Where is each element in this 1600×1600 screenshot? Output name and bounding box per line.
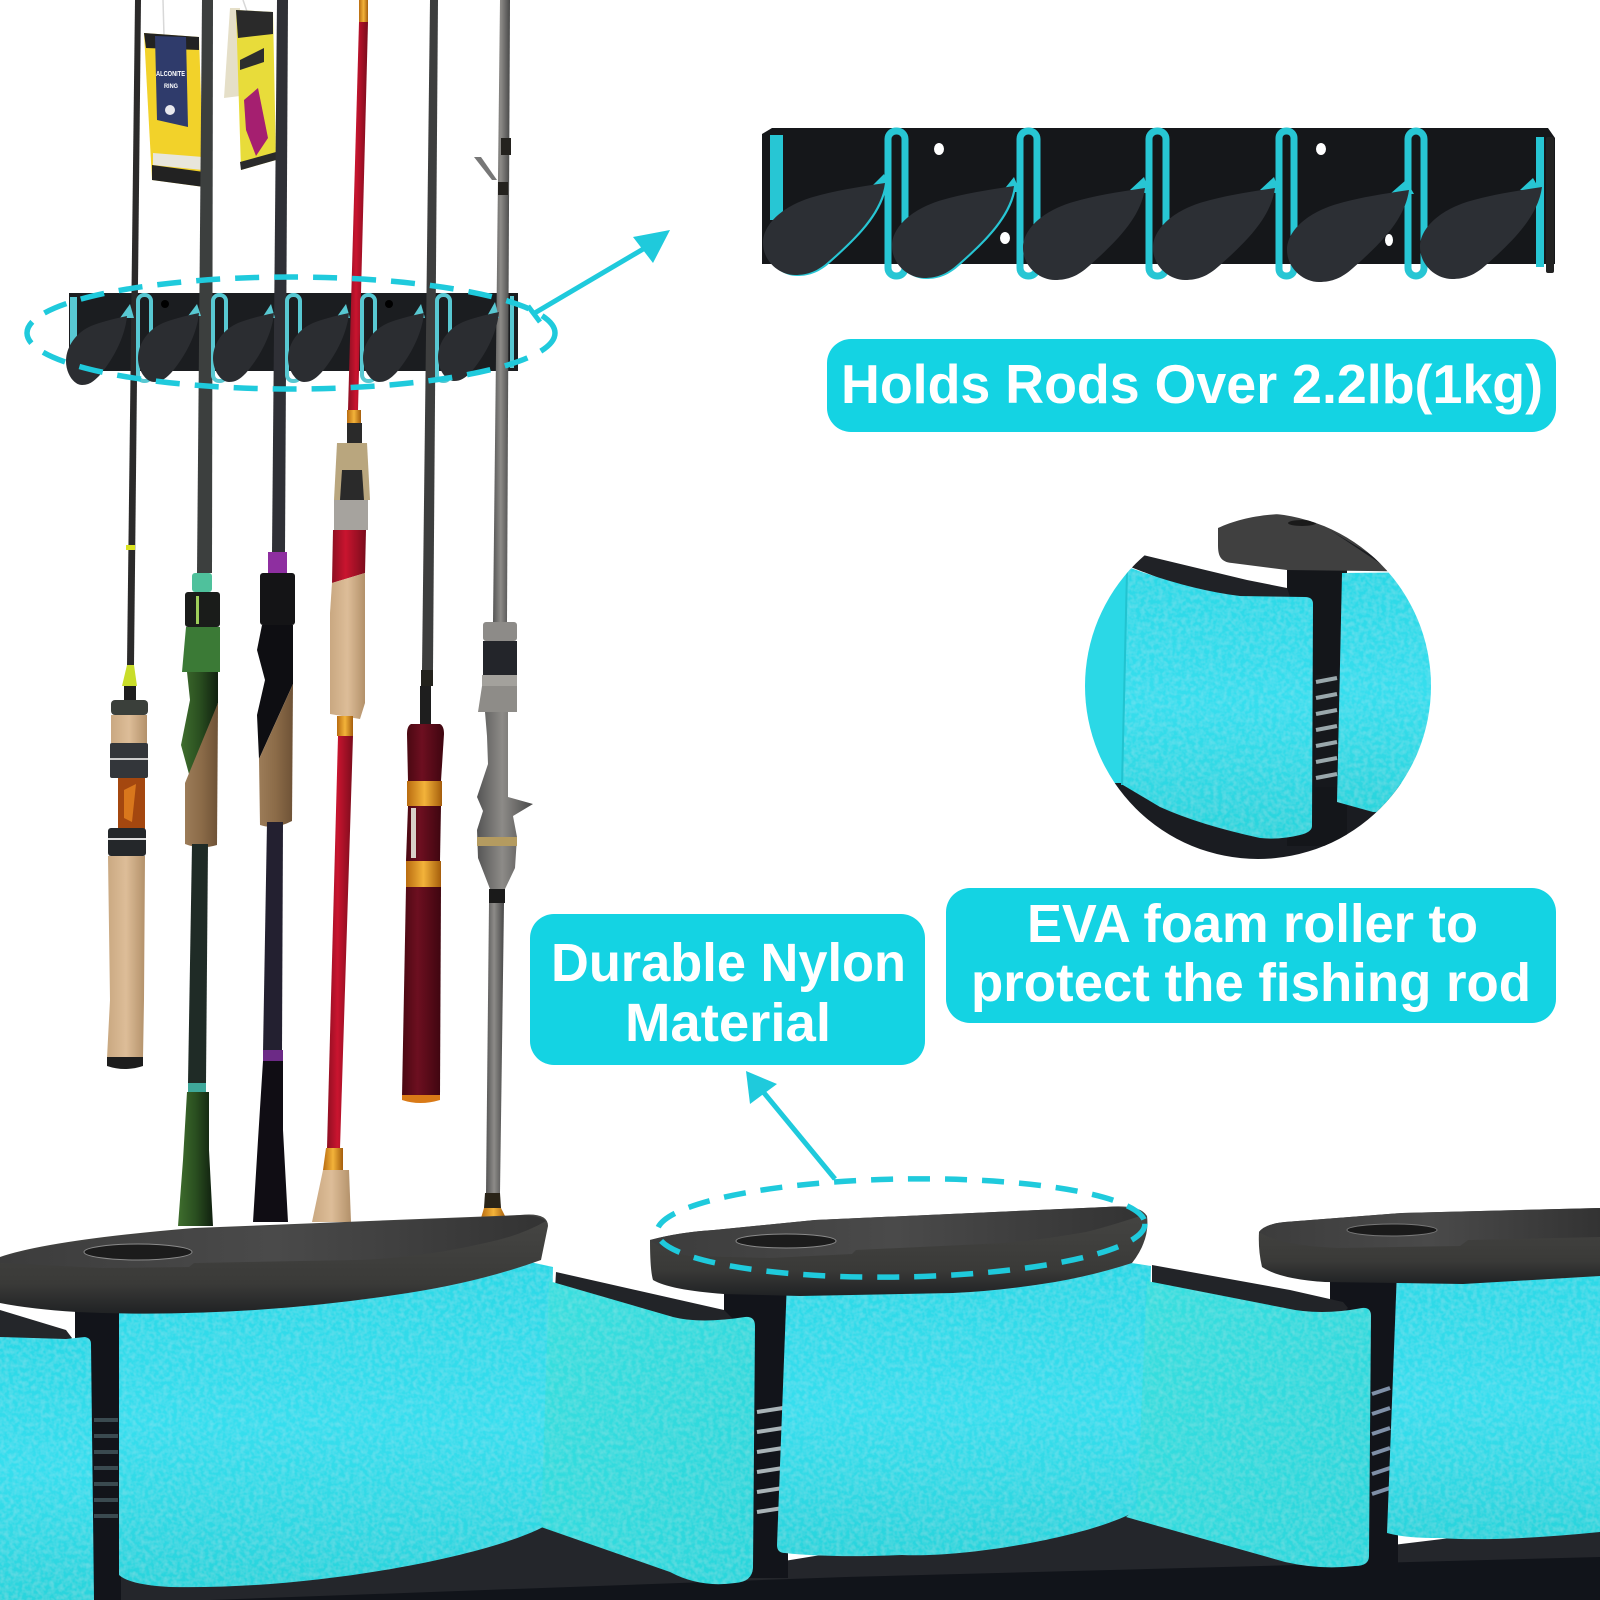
mounting holes: [934, 143, 1393, 246]
mounted rack backplate: small view: [69, 293, 518, 371]
tag: yellow Alconite card: ALCONITE: [156, 71, 185, 78]
foam pads: [763, 183, 1542, 282]
mounted rack clips and pads: small view: [66, 295, 514, 385]
callout: EVA foam roller: protect the fishing rod: [971, 953, 1531, 1013]
dark base: [1114, 783, 1402, 859]
foam roller 1: [119, 1262, 553, 1587]
enlarged close-up of rack at bottom: [0, 1206, 1600, 1600]
tag: yellow Alconite card: [144, 0, 204, 187]
springs: [94, 1388, 1390, 1516]
spring: [1316, 676, 1338, 780]
top plate 1: [0, 1214, 548, 1314]
top plate 2: [650, 1206, 1147, 1296]
fishing rod 1: cork spinning handle: [107, 0, 148, 1069]
fishing rod 5: maroon handle with orange rings: [402, 0, 444, 1103]
top plate 3: [1259, 1208, 1600, 1284]
callout: durable nylon: Material: [625, 993, 831, 1053]
callout: holds rods: Holds Rods Over 2.2lb(1kg): [841, 353, 1543, 415]
fishing rod 4: red with light cork: [312, 0, 370, 1222]
foam flap 2: [1126, 1281, 1371, 1567]
backplate: [762, 128, 1555, 264]
callout: durable nylon: Durable Nylon: [551, 933, 906, 993]
callout: holds rods: [827, 339, 1556, 432]
teal pad edges: [765, 184, 1016, 279]
dashed ellipse around small rack: [27, 277, 555, 389]
arrow: rack to enlarged view: [528, 230, 670, 322]
left foam flap: [0, 1310, 72, 1342]
fishing rod 3: black and purple with dark cork grip: [253, 0, 295, 1222]
foam panel: [1123, 567, 1313, 839]
teal tabs: [872, 174, 1541, 194]
enlarged rack view: [762, 128, 1555, 282]
foam roller 3: [1387, 1262, 1600, 1539]
circular detail: EVA foam roller close-up: [1080, 514, 1445, 870]
fishing rod 6: grey casting rod with trigger handle: [474, 0, 533, 1218]
tag: yellow Alconite card: RING: [164, 83, 178, 90]
floor and base: [94, 1505, 1600, 1600]
foam flap 1: [541, 1281, 755, 1584]
arrow: to top plate: [746, 1071, 835, 1179]
dashed ellipse around top plate: [656, 1175, 1146, 1281]
right foam panel: [1337, 572, 1431, 812]
callout: EVA foam roller: EVA foam roller to: [1027, 894, 1478, 954]
foam roller 2: [777, 1262, 1151, 1556]
left foam strip: [1085, 570, 1130, 787]
callout: durable nylon: [530, 914, 925, 1065]
support columns: [75, 1300, 121, 1600]
teal clips: [888, 131, 1424, 276]
top plate: [1218, 514, 1388, 572]
fishing rod 2: green with dark cork grip: [178, 0, 220, 1226]
callout: EVA foam roller: [946, 888, 1556, 1023]
dark strip on flap 1: [555, 1272, 732, 1324]
support column: [1287, 566, 1347, 846]
tag: yellow second card: [224, 0, 276, 170]
dark strip on flap 2: [1152, 1265, 1348, 1316]
dark strip on foam panel: [1128, 555, 1291, 600]
